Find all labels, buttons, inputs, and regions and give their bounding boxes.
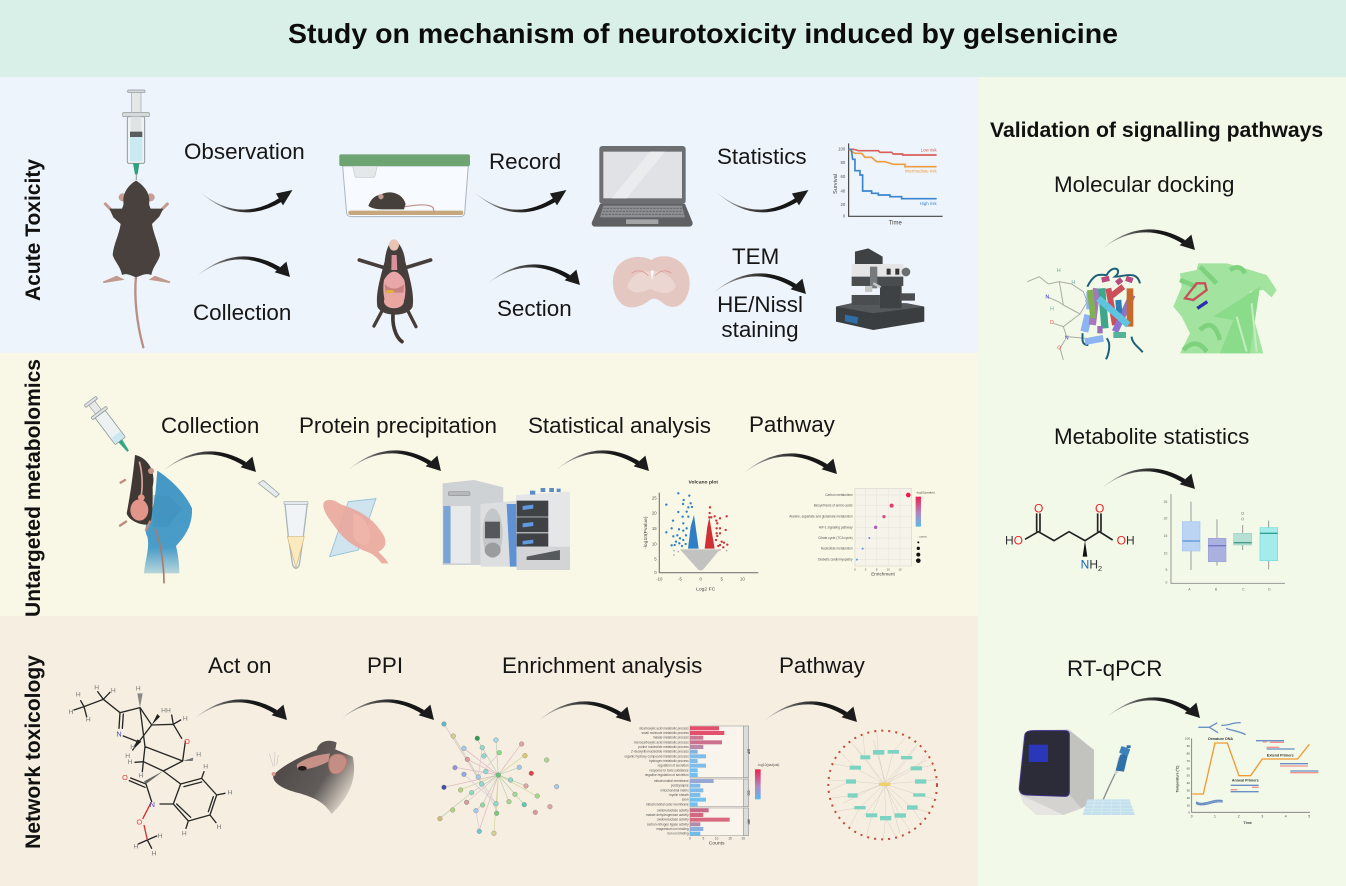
chart: enrichment bar chart: magnesium ion binding xyxy=(656,827,689,831)
icon: gelsenicine molecular structure: H xyxy=(136,686,141,693)
label: Collection: Collection xyxy=(193,300,291,325)
icon: gelsenicine molecular structure: N xyxy=(150,800,155,809)
icon: faded ligand structure: H xyxy=(1057,268,1061,274)
icon: gelsenicine molecular structure: H xyxy=(152,851,157,858)
arrow: section to brain slice xyxy=(487,264,579,284)
chart: enrichment bar chart: -log10(padjust) xyxy=(757,763,779,767)
chart: volcano plot: 0 xyxy=(654,570,657,575)
chart: enrichment bar chart: mitochondrial matrix xyxy=(660,788,689,792)
chart: survival curves: 40 xyxy=(840,188,846,193)
icon: brain with slice xyxy=(323,499,388,563)
arrow: analysis to volcano plot xyxy=(556,450,648,470)
chart: enrichment bar chart: negative regulation of secretion xyxy=(645,773,689,777)
chart: enrichment bar chart: oxidoreductase activity xyxy=(657,808,689,812)
icon: faded ligand structure: H xyxy=(1050,307,1054,313)
icon: gelsenicine molecular structure: H xyxy=(134,843,139,850)
chart: pathway bubble plot: Biosynthesis of amino acids xyxy=(814,504,853,508)
chart: survival curves: 0 xyxy=(843,214,846,219)
chart: pathway bubble plot: Carbon metabolism xyxy=(825,493,853,497)
icon: faded ligand structure xyxy=(1027,268,1089,360)
icon: GPCR protein cylinders xyxy=(1082,269,1143,359)
chart: PCR thermal profile: 100 xyxy=(1185,737,1190,741)
chart: survival curves: 80 xyxy=(840,160,846,165)
icon: gelsenicine molecular structure: HH xyxy=(161,708,171,715)
chart: PCR thermal profile: Time xyxy=(1243,821,1252,825)
icon: gelsenicine molecular structure: H xyxy=(196,752,201,759)
icon: glutamic acid structure xyxy=(1005,502,1135,573)
chart: PCR thermal profile: 5 xyxy=(1308,814,1310,818)
chart: PCR thermal profile: Extend Primers xyxy=(1267,753,1294,757)
chart: box plot: 20 xyxy=(1164,517,1167,521)
icon: gelsenicine molecular structure: H xyxy=(111,688,116,695)
icon: gelsenicine molecular structure: H xyxy=(139,772,144,779)
chart: enrichment bar chart: carbon-nitrogen ligase activity xyxy=(647,822,689,826)
arrow: metabolite to boxplot xyxy=(1102,468,1194,488)
chart: survival curves: 20 xyxy=(840,202,846,207)
chart: box plot: 25 xyxy=(1164,500,1167,504)
icon: gelsenicine molecular structure: H xyxy=(182,831,187,838)
chart: box plot xyxy=(1164,494,1285,592)
chart: box plot: C xyxy=(1242,588,1245,592)
arrow: pathway to circular network xyxy=(764,701,856,721)
chart: PCR thermal profile xyxy=(1176,723,1318,825)
icon: glutamic acid structure: O xyxy=(1034,502,1043,516)
arrow: staining to microscope xyxy=(713,273,805,293)
icon: gelsenicine molecular structure: H xyxy=(228,790,233,797)
icon: glutamic acid structure: OH xyxy=(1117,534,1135,548)
chart: volcano plot: 10 xyxy=(652,542,657,547)
chart: enrichment bar chart: response to toxic substance xyxy=(650,768,689,772)
chart: PCR thermal profile: Denature DNA xyxy=(1208,737,1233,741)
chart: pathway bubble plot: Alanine, aspartate and glutamate metabolism xyxy=(789,515,853,519)
chart: enrichment bar chart: 2'-deoxyribonucleotide metabolic process xyxy=(631,750,689,754)
heading: Network toxicology: Network toxicology xyxy=(22,655,45,849)
icon: gelsenicine molecular structure: H xyxy=(76,692,81,699)
icon: gelsenicine molecular structure: H xyxy=(94,685,99,692)
icon: brain section xyxy=(613,256,690,307)
chart: PCR thermal profile: 4 xyxy=(1285,814,1287,818)
icon: LC-MS instrument xyxy=(443,480,570,570)
label: Metabolite statistics: Metabolite statistics xyxy=(1054,424,1249,449)
chart: box plot: B xyxy=(1215,588,1218,592)
icon: faded ligand structure: O xyxy=(1085,299,1089,305)
chart: pathway bubble plot: HIF-1 signaling pathway xyxy=(819,525,853,529)
arrow: enrichment to bar chart xyxy=(538,701,630,721)
arrow: precipitation to instrument xyxy=(348,450,440,470)
icon: qPCR machine xyxy=(1018,729,1094,815)
label: RT-qPCR: RT-qPCR xyxy=(1067,656,1162,681)
arrow: qPCR machine to thermal profile xyxy=(1107,697,1199,717)
chart: pathway bubble plot: count xyxy=(919,534,927,538)
chart: enrichment bar chart: oxidoreductase activity xyxy=(657,818,689,822)
chart: PCR thermal profile: 80 xyxy=(1187,751,1190,755)
title: Study on mechanism of neurotoxicity induced by gelsenicine xyxy=(288,18,1118,49)
icon: gelsenicine molecular structure: H xyxy=(158,833,163,840)
heading: Untargeted metabolomics: Untargeted metabolomics xyxy=(22,359,45,617)
chart: survival curves xyxy=(833,143,943,226)
icon: faded ligand structure: H xyxy=(1071,280,1075,286)
chart: volcano plot: 10 xyxy=(740,577,745,582)
chart: pathway bubble plot: 5 xyxy=(865,567,867,571)
chart: enrichment bar chart: mitochondrial membrane xyxy=(654,779,689,783)
icon: pipette and well plate xyxy=(1083,745,1135,815)
chart: PCR thermal profile: 70 xyxy=(1187,759,1190,763)
chart: circular compound-target network xyxy=(828,731,940,839)
chart: PCR thermal profile: 20 xyxy=(1187,796,1190,800)
label: Protein precipitation: Protein precipitation xyxy=(299,413,497,438)
chart: pathway bubble plot: -log10(pvalue) xyxy=(916,491,935,495)
chart: box plot: D xyxy=(1268,588,1271,592)
chart: pathway bubble plot: 15 xyxy=(898,567,902,571)
icon: faded ligand structure: N xyxy=(1045,295,1049,301)
chart: PCR thermal profile: 1 xyxy=(1214,814,1216,818)
panel: validation of signalling pathways xyxy=(978,77,1346,886)
title banner xyxy=(0,0,1346,77)
arrow: pathway to bubble plot xyxy=(744,453,836,473)
icon: faded ligand structure: O xyxy=(1057,345,1061,351)
chart: enrichment bar chart: monocarboxylic acid metabolic process xyxy=(634,740,689,744)
arrow: collection to tube xyxy=(163,451,255,471)
icon: gelsenicine molecular structure: H xyxy=(130,744,135,751)
chart: box plot: 5 xyxy=(1165,568,1167,572)
chart: volcano plot: 20 xyxy=(652,510,657,515)
chart: enrichment bar chart: organic hydroxy compound metabolic process xyxy=(624,754,689,758)
label: Observation: Observation xyxy=(184,139,305,164)
chart: enrichment bar chart: postsynapse xyxy=(671,784,689,788)
panel: untargeted metabolomics xyxy=(0,353,978,617)
icon: gelsenicine molecular structure: O xyxy=(122,773,128,782)
chart: volcano plot: 15 xyxy=(652,526,657,531)
arrow: PPI to network xyxy=(341,699,433,719)
chart: enrichment bar chart: CC xyxy=(746,790,750,796)
chart: enrichment bar chart: 15 xyxy=(728,836,732,840)
label: PPI: PPI xyxy=(367,653,403,678)
chart: pathway bubble plot: Enrichment xyxy=(871,571,895,576)
chart: enrichment bar chart: small molecule metabolic process xyxy=(641,731,689,735)
chart: PCR thermal profile: 30 xyxy=(1187,789,1190,793)
chart: volcano plot: Volcano plot xyxy=(689,479,718,485)
label: Statistics: Statistics xyxy=(717,144,807,169)
heading: Validation of signalling pathways: Validation of signalling pathways xyxy=(990,119,1323,142)
panel: acute toxicity xyxy=(0,77,978,353)
label: Record: Record xyxy=(489,149,561,174)
icon: gelsenicine molecular structure: N xyxy=(116,729,122,738)
chart: enrichment bar chart: purine nucleotide metabolic process xyxy=(638,745,689,749)
chart: volcano plot: 5 xyxy=(720,577,723,582)
icon: gelsenicine molecular structure: O xyxy=(136,817,142,826)
icon: laptop xyxy=(592,146,693,227)
icon: mouse cage xyxy=(339,154,470,217)
icon: gelsenicine molecular structure xyxy=(69,685,233,858)
icon: gelsenicine molecular structure: O xyxy=(184,737,190,746)
icon: glutamic acid structure: 2 xyxy=(1098,564,1102,573)
chart: enrichment bar chart: axon xyxy=(682,798,689,802)
icon: glutamic acid structure: O xyxy=(1095,502,1104,516)
icon: glutamic acid structure: HO xyxy=(1005,534,1023,548)
chart: enrichment bar chart: myelin sheath xyxy=(669,793,689,797)
chart: survival curves: 60 xyxy=(840,174,846,179)
chart: PCR thermal profile: 2 xyxy=(1238,814,1240,818)
chart: PCR thermal profile: 10 xyxy=(1187,803,1190,807)
icon: faded ligand structure: N xyxy=(1065,335,1069,341)
chart: pathway bubble plot: 0 xyxy=(854,567,856,571)
chart: PCR thermal profile: 50 xyxy=(1187,774,1190,778)
chart: protein interaction network xyxy=(438,722,559,836)
chart: volcano plot: -5 xyxy=(678,577,683,582)
chart: enrichment bar chart: 10 xyxy=(715,836,719,840)
chart: box plot: A xyxy=(1188,588,1191,592)
icon: syringe xyxy=(123,90,149,180)
icon: gelsenicine molecular structure: H xyxy=(183,716,188,723)
chart: volcano plot: -10 xyxy=(656,577,663,582)
label: TEM: TEM xyxy=(732,244,779,269)
chart: pathway bubble plot: Diabetic cardiomyopathy xyxy=(818,558,853,562)
chart: enrichment bar chart: 0 xyxy=(689,836,691,840)
icon: gelsenicine molecular structure: H xyxy=(203,763,208,770)
chart: PCR thermal profile: Temperature (°C) xyxy=(1176,766,1180,792)
label: Pathway: Pathway xyxy=(749,412,836,437)
chart: enrichment bar chart: 5 xyxy=(702,836,704,840)
icon: gelsenicine molecular structure: H xyxy=(217,824,222,831)
chart: PCR thermal profile: 40 xyxy=(1187,781,1190,785)
arrow: collection to dissection xyxy=(197,256,289,276)
panel: network toxicology xyxy=(0,616,978,886)
arrow: molecule to mouse xyxy=(194,699,286,719)
icon: dissected mouse xyxy=(359,239,431,342)
icon: glutamic acid structure: NH xyxy=(1081,557,1098,571)
chart: survival curves: Intermediate risk xyxy=(905,168,937,173)
chart: volcano plot: 5 xyxy=(654,556,657,561)
chart: survival curves: High risk xyxy=(920,201,937,206)
chart: enrichment bar chart: BP xyxy=(746,749,750,755)
arrow: observation to cage xyxy=(199,191,291,212)
chart: volcano plot: Log2 FC xyxy=(696,586,716,592)
icon: gelsenicine molecular structure: H xyxy=(125,753,130,760)
chart: enrichment bar chart: Counts xyxy=(709,841,725,847)
label: Act on: Act on xyxy=(208,653,271,678)
chart: volcano plot: 25 xyxy=(652,495,657,500)
chart: enrichment bar chart: mitochondrial outer membrane xyxy=(646,802,689,806)
chart: enrichment bar chart: iron ion binding xyxy=(667,832,689,836)
chart: PCR thermal profile: 3 xyxy=(1261,814,1263,818)
icon: docked protein xyxy=(1173,263,1277,353)
label: Enrichment analysis: Enrichment analysis xyxy=(502,653,702,678)
arrow: ligand to docked protein xyxy=(1102,229,1194,249)
chart: enrichment bar chart: regulation of secretion xyxy=(658,764,689,768)
icon: microscope xyxy=(836,248,924,330)
chart: PCR thermal profile: Anneal Primers xyxy=(1232,778,1259,782)
icon: mouse head xyxy=(269,741,354,814)
chart: survival curves: Low risk xyxy=(921,148,937,153)
chart: enrichment bar chart: hydrogen metabolic process xyxy=(649,759,689,763)
chart: box plot: 10 xyxy=(1164,551,1167,555)
chart: survival curves: 100 xyxy=(838,147,846,152)
chart: box plot: 15 xyxy=(1164,534,1167,538)
chart: enrichment bar chart: MF xyxy=(746,819,750,825)
label: HE/Nissl staining: staining xyxy=(721,317,799,342)
arrow: statistics to survival chart xyxy=(715,191,807,212)
chart: PCR thermal profile: 60 xyxy=(1187,766,1190,770)
chart: volcano plot: -log10(Pvalue) xyxy=(643,516,649,549)
chart: enrichment bar chart: dicarboxylic acid metabolic process xyxy=(639,726,689,730)
icon: microcentrifuge tube xyxy=(258,480,308,568)
chart: enrichment bar chart xyxy=(624,726,779,847)
chart: pathway bubble plot xyxy=(789,488,935,576)
chart: enrichment bar chart: malate dehydrogenase activity xyxy=(646,813,689,817)
icon: gelsenicine molecular structure: H xyxy=(69,709,74,716)
label: Collection: Collection xyxy=(161,413,259,438)
chart: pathway bubble plot: 8 xyxy=(876,567,878,571)
chart: pathway bubble plot: Citrate cycle (TCA cycle) xyxy=(818,536,853,540)
label: HE/Nissl staining: HE/Nissl xyxy=(717,292,803,317)
arrow: record to laptop xyxy=(473,191,565,212)
chart: PCR thermal profile: 0 xyxy=(1188,811,1190,815)
chart: volcano plot: 0 xyxy=(699,577,702,582)
chart: volcano plot xyxy=(643,479,758,592)
label: Pathway: Pathway xyxy=(779,653,866,678)
chart: PCR thermal profile: 0 xyxy=(1191,814,1193,818)
icon: injected mouse held in gloved hand xyxy=(83,395,192,583)
chart: enrichment bar chart: malate metabolic process xyxy=(653,736,689,740)
label: Section: Section xyxy=(497,296,572,321)
icon: gelsenicine molecular structure: H xyxy=(128,759,133,766)
chart: pathway bubble plot: 10 xyxy=(887,567,890,571)
chart: PCR thermal profile: 90 xyxy=(1187,744,1190,748)
icon: faded ligand structure: O xyxy=(1050,320,1054,326)
icon: mouse dorsal view xyxy=(103,180,170,347)
label: Molecular docking: Molecular docking xyxy=(1054,172,1234,197)
icon: gelsenicine molecular structure: H xyxy=(86,717,91,724)
heading: Acute Toxicity: Acute Toxicity xyxy=(22,159,45,301)
label: Statistical analysis: Statistical analysis xyxy=(528,413,711,438)
chart: survival curves: Time xyxy=(889,220,903,226)
chart: pathway bubble plot: Nucleotide metabolism xyxy=(821,547,853,551)
chart: box plot: 0 xyxy=(1165,580,1167,584)
chart: enrichment bar chart: 20 xyxy=(742,836,745,840)
chart: survival curves: Survival xyxy=(833,174,839,194)
